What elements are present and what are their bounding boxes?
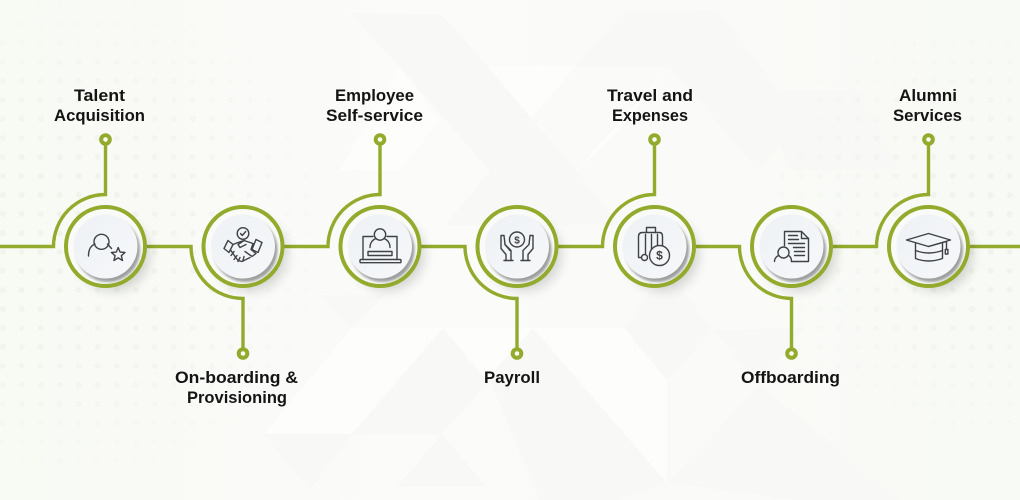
node: travel and expenses xyxy=(615,207,698,290)
label: talent acquisition: Acquisition xyxy=(54,106,145,125)
icon: laptop user xyxy=(360,229,401,263)
icon: graduation cap xyxy=(906,234,950,261)
label: offboarding: Offboarding xyxy=(741,368,840,387)
icon: hands with coin xyxy=(501,232,533,260)
label: travel and expenses: Travel and xyxy=(607,86,693,105)
connector line xyxy=(0,135,1020,358)
icon text: dollar: $ xyxy=(514,235,520,246)
label: talent acquisition xyxy=(54,86,145,125)
label: employee self-service xyxy=(326,86,423,125)
node: talent acquisition xyxy=(66,207,150,290)
label: on-boarding and provisioning: On-boarding & xyxy=(175,368,298,387)
label: on-boarding and provisioning: Provisioning xyxy=(187,388,287,407)
label: travel and expenses: Expenses xyxy=(612,106,688,125)
label: alumni services xyxy=(893,86,962,125)
label: travel and expenses xyxy=(607,86,693,125)
icon: person with star xyxy=(88,234,125,260)
label: employee self-service: Self-service xyxy=(326,106,423,125)
label: payroll: Payroll xyxy=(484,368,540,387)
label: employee self-service: Employee xyxy=(335,86,414,105)
label: alumni services: Services xyxy=(893,106,962,125)
background xyxy=(0,60,1012,407)
label: talent acquisition: Talent xyxy=(74,86,125,105)
icon: handshake xyxy=(224,228,262,262)
node: payroll xyxy=(478,207,561,290)
node: on-boarding xyxy=(204,207,287,290)
node: alumni services xyxy=(889,207,972,290)
node: offboarding xyxy=(752,207,836,290)
label: on-boarding and provisioning xyxy=(175,368,298,407)
node: employee self-service xyxy=(340,207,424,290)
icon: suitcase with coin xyxy=(638,228,670,266)
icon: person with document xyxy=(774,232,808,262)
label: alumni services: Alumni xyxy=(899,86,957,105)
icon text: dollar: $ xyxy=(656,248,663,262)
